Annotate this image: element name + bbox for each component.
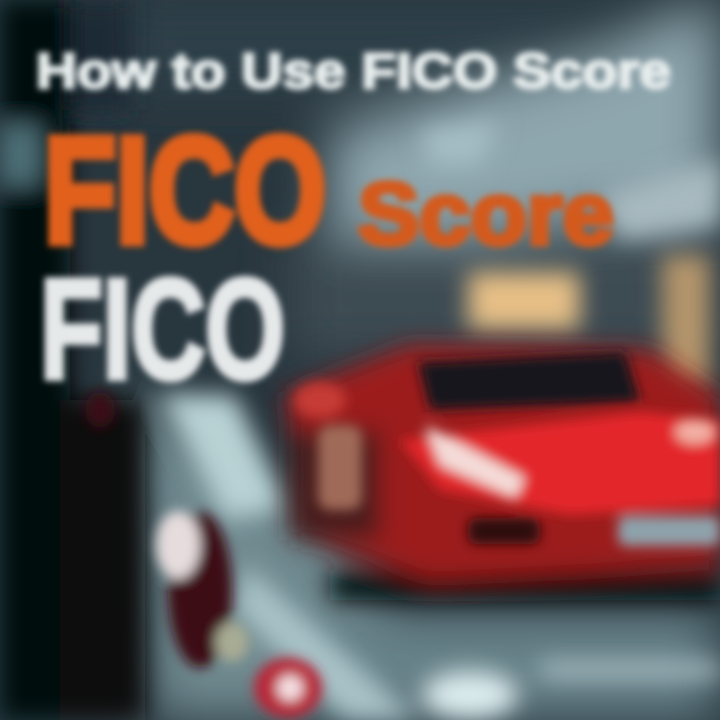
- heading: orange FICO Score: FICO: [44, 106, 326, 274]
- heading: orange FICO Score: [44, 106, 614, 274]
- heading: white FICO: FICO: [40, 250, 285, 409]
- red sports car: [285, 345, 720, 600]
- title: small white heading: How to Use FICO Score: [36, 43, 671, 99]
- foreground red and white lights: [85, 392, 322, 718]
- heading: orange FICO Score: Score: [358, 164, 614, 263]
